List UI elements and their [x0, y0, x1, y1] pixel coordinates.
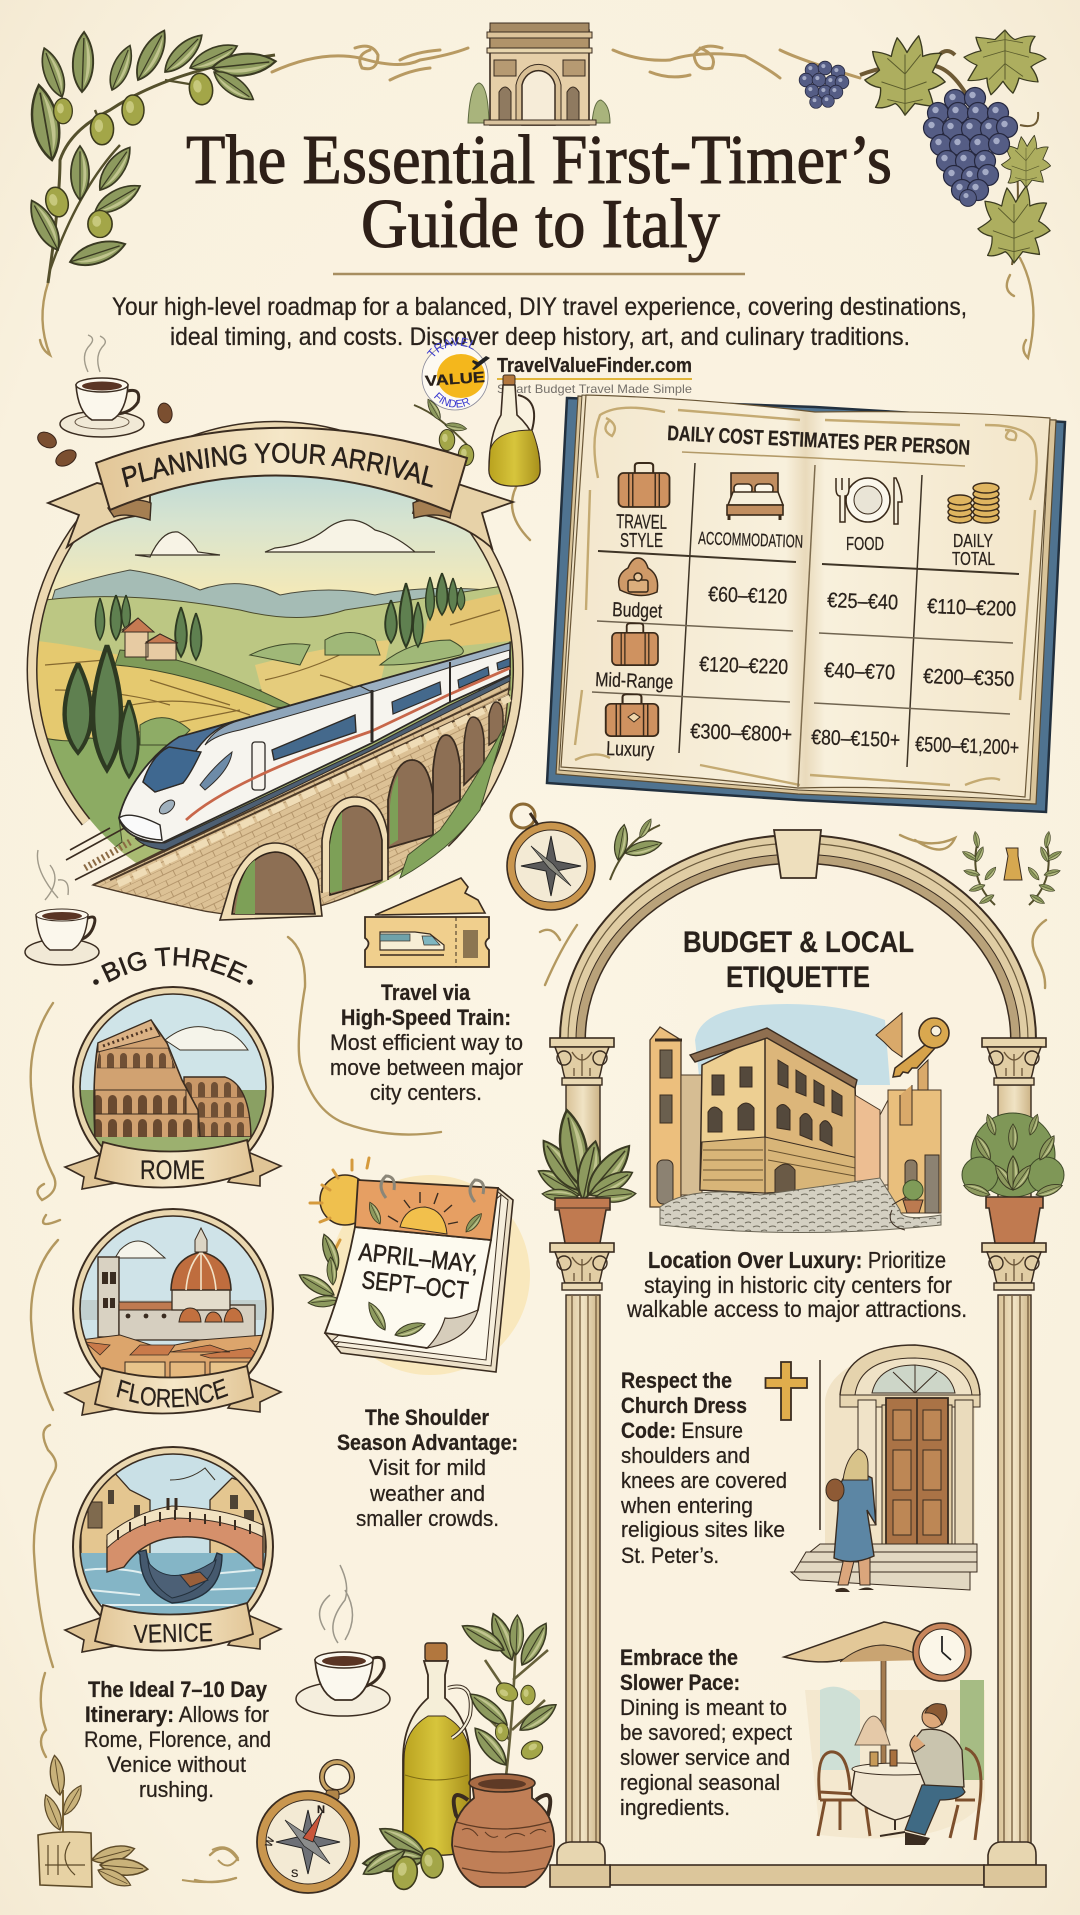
table rules	[592, 463, 1019, 787]
left lower capital	[550, 1243, 614, 1290]
text: shoulder season tip: weather and	[369, 1481, 485, 1506]
TravelValueFinder logo: VALUE	[424, 369, 485, 390]
icon: olive oil bottle bottom	[403, 1643, 471, 1855]
title	[186, 122, 892, 263]
arch heading: ETIQUETTE	[726, 961, 870, 994]
icon: coffee cup left	[25, 850, 99, 965]
icon: pocket compass middle	[507, 804, 595, 910]
left column shaft upper	[566, 1085, 600, 1203]
text: church dress code: Code: Ensure	[621, 1418, 743, 1443]
table text: STYLE	[620, 530, 663, 552]
text: high-speed train tip: Most efficient way to	[330, 1030, 523, 1055]
medallion: Rome	[65, 987, 281, 1190]
text: slower pace: Dining is meant to	[620, 1695, 787, 1720]
text: slower pace: regional seasonal	[620, 1770, 780, 1795]
historic street illustration	[650, 1004, 941, 1232]
table text: TOTAL	[952, 549, 995, 569]
icon: olive sprig	[610, 817, 663, 880]
table text: Budget	[612, 599, 663, 623]
table text: Mid-Range	[595, 669, 674, 694]
subtitle: ideal timing, and costs. Discover deep history, art, and culinary traditions.	[170, 323, 910, 351]
icon: mid-range suitcase	[612, 623, 658, 665]
medallion: Florence: FLORENCE	[116, 1378, 228, 1408]
text: shoulder season tip: The Shoulder	[365, 1405, 489, 1430]
icon: compass bottom: N	[317, 1804, 325, 1816]
ribbon banner	[46, 426, 516, 550]
right upper capital	[982, 1038, 1046, 1085]
scene ring	[32, 426, 518, 843]
text: location over luxury	[626, 1247, 967, 1322]
arch base beam	[550, 1842, 1046, 1887]
icon: coin stacks	[948, 483, 999, 523]
text: shoulder season tip	[337, 1405, 518, 1531]
table text: €25–€40	[827, 589, 899, 614]
TravelValueFinder logo: TRAVEL	[426, 337, 474, 356]
text: church dress code: Respect the	[621, 1368, 732, 1393]
text: church dress code: knees are covered	[621, 1468, 787, 1493]
book corner ornaments	[575, 408, 1037, 785]
ribbon banner: PLANNING YOUR ARRIVAL	[122, 442, 433, 488]
text: high-speed train tip	[330, 980, 523, 1105]
medallion: Venice	[65, 1447, 281, 1652]
top-left olive branch	[23, 26, 277, 283]
TravelValueFinder logo: FINDER	[434, 392, 470, 408]
text: location over luxury: Location Over Luxury: Prioritize	[648, 1247, 946, 1273]
table text: €120–€220	[699, 653, 789, 679]
table text: €80–€150+	[811, 726, 901, 752]
arch band	[560, 835, 1036, 1040]
icon: olive sprig near oil bottle	[414, 397, 474, 466]
medallion: Florence	[63, 1208, 283, 1416]
right column lower	[998, 1295, 1031, 1845]
woman figure	[826, 1449, 876, 1592]
icon: coffee cup top left	[60, 335, 144, 437]
table text: FOOD	[846, 534, 884, 554]
right column shaft upper	[998, 1085, 1031, 1203]
right lower capital	[982, 1243, 1046, 1290]
icon: compass bottom: W	[264, 1835, 277, 1849]
text: location over luxury: walkable access to major attractions.	[626, 1296, 967, 1322]
icon: compass bottom	[257, 1762, 359, 1893]
icon: compass bottom: S	[291, 1868, 298, 1880]
text: high-speed train tip: Travel via	[381, 980, 471, 1005]
text: high-speed train tip: High-Speed Train:	[341, 1005, 511, 1030]
text: itinerary tip: Itinerary: Allows for	[85, 1702, 269, 1727]
heading: big three: BIG THREE	[101, 947, 248, 983]
arch heading: BUDGET & LOCAL	[683, 926, 914, 959]
text: itinerary tip	[84, 1677, 271, 1802]
text: high-speed train tip: move between major	[330, 1055, 523, 1080]
text: church dress code: when entering	[620, 1493, 753, 1518]
text: itinerary tip: rushing.	[139, 1777, 214, 1802]
book heading: DAILY COST ESTIMATES PER PERSON	[667, 422, 971, 460]
icon: wall calendar: SEPT–OCT	[360, 1266, 470, 1305]
text: slower pace: be savored; expect	[620, 1720, 792, 1745]
icon: bottom-left parchment ornament	[38, 1754, 238, 1891]
icon: wall calendar	[296, 1158, 530, 1375]
right potted plant	[962, 1113, 1064, 1243]
top flourish right	[613, 46, 860, 78]
text: church dress code	[620, 1368, 787, 1568]
table text: €60–€120	[708, 583, 788, 609]
icon: large suitcase	[618, 463, 670, 507]
text: slower pace	[620, 1645, 792, 1820]
table text: €200–€350	[923, 665, 1015, 691]
text: slower pace: slower service and	[620, 1745, 790, 1770]
medallion: Rome: ROME	[140, 1155, 205, 1185]
table text: ACCOMMODATION	[698, 528, 803, 552]
panel: budget and etiquette arch	[534, 830, 1064, 1887]
keystone	[774, 830, 821, 878]
high-speed train	[119, 643, 510, 850]
circular scene	[38, 476, 513, 896]
icon: coffee cup bottom	[296, 1565, 390, 1716]
text: itinerary tip: Venice without	[107, 1752, 246, 1777]
icon: luxury suitcase	[606, 694, 658, 736]
table text: TRAVEL	[616, 511, 667, 534]
decorative side vines	[31, 258, 1046, 1882]
TravelValueFinder logo: Smart Budget Travel Made Simple	[497, 382, 692, 396]
table text: €40–€70	[824, 659, 896, 684]
icon: olive oil bottle	[489, 375, 540, 486]
text: slower pace: Embrace the	[620, 1645, 738, 1670]
icon: gold cross	[766, 1362, 807, 1420]
icon: gold key	[893, 1018, 949, 1077]
text: shoulder season tip: Season Advantage:	[337, 1430, 518, 1455]
table text: €110–€200	[927, 595, 1017, 621]
icon: laurel wreath	[961, 831, 1063, 906]
grape vine corner	[799, 30, 1051, 265]
top triumphal arch	[468, 23, 610, 125]
seated man	[905, 1780, 965, 1835]
text: church dress code: St. Peter’s.	[621, 1543, 719, 1568]
TravelValueFinder logo: TravelValueFinder.com	[497, 355, 692, 377]
stone aqueduct	[93, 678, 510, 920]
table	[851, 1770, 950, 1820]
text: slower pace: Slower Pace:	[620, 1670, 740, 1695]
text: slower pace: ingredients.	[620, 1795, 730, 1820]
icon: olive plant in clay jug	[359, 1610, 560, 1891]
church entrance illustration	[791, 1345, 980, 1592]
table text	[595, 511, 1020, 762]
left upper capital	[550, 1038, 614, 1085]
top flourish left	[272, 46, 468, 80]
subtitle	[112, 293, 967, 351]
text: high-speed train tip: city centers.	[370, 1080, 482, 1105]
icon: bed	[727, 473, 783, 520]
icon: wall calendar: APRIL–MAY,	[357, 1238, 480, 1279]
text: shoulder season tip: smaller crowds.	[356, 1506, 499, 1531]
text: location over luxury: staying in historic city centers for	[644, 1272, 952, 1298]
subtitle: Your high-level roadmap for a balanced, DIY travel experience, covering destinations,	[112, 293, 967, 321]
table text: €300–€800+	[690, 720, 793, 747]
table text: Luxury	[606, 738, 655, 762]
table text: DAILY	[953, 531, 993, 551]
icon: backpack	[619, 558, 658, 596]
title: The Essential First-Timer’s	[186, 122, 892, 199]
medallion: Venice: VENICE	[133, 1617, 213, 1649]
text: itinerary tip: Rome, Florence, and	[84, 1727, 271, 1752]
icon: coffee beans	[35, 402, 174, 470]
text: itinerary tip: The Ideal 7–10 Day	[88, 1677, 268, 1702]
title: Guide to Italy	[361, 186, 720, 263]
icon: train ticket	[365, 878, 489, 967]
left column lower	[566, 1295, 600, 1845]
railway track	[66, 825, 150, 880]
table text: €500–€1,200+	[915, 733, 1020, 760]
chairs	[818, 1752, 872, 1836]
panel: daily cost book	[547, 395, 1065, 812]
text: church dress code: Church Dress	[621, 1393, 747, 1418]
icon: plate and cutlery	[836, 478, 902, 524]
TravelValueFinder logo	[422, 337, 692, 410]
left potted plant	[534, 1108, 637, 1243]
text: shoulder season tip: Visit for mild	[369, 1455, 486, 1480]
cafe illustration	[784, 1622, 985, 1845]
text: church dress code: shoulders and	[621, 1443, 750, 1468]
text: church dress code: religious sites like	[621, 1517, 785, 1542]
arch heading	[683, 926, 914, 994]
panel: planning your arrival	[26, 420, 524, 921]
